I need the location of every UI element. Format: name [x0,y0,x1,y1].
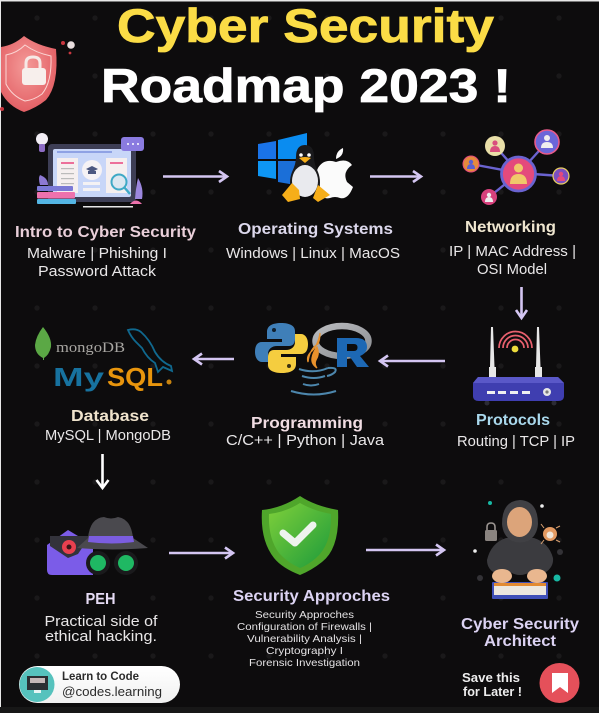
save this for later text [462,671,522,699]
heading: Security Approches: Security Approches [233,588,390,605]
description: Programming: C/C++ | Python | Java [226,433,385,449]
description: Intro: Password Attack [38,264,157,280]
description: Security Approches: Cryptography I [266,645,343,657]
description: Security Approches: Configuration of Firewalls | [237,621,372,633]
badge: Learn to Code [19,666,180,703]
heading: Intro to Cyber Security: Intro to Cyber Security [15,224,196,241]
description: Security Approches [237,609,372,669]
heading: Cyber Security Architect [461,616,579,650]
icon: MongoDB and MySQL logos [35,327,172,392]
icon: Windows, Linux, Apple logos [258,133,353,202]
icon: MongoDB and MySQL logos: mongoDB [56,340,125,356]
save this for later text: for Later ! [463,685,522,699]
title [101,0,511,112]
arrow 5 [194,354,234,364]
icon: wifi router [473,327,564,406]
step: Protocols [457,327,575,450]
description: Networking: IP | MAC Address | [449,244,576,260]
badge name: Learn to Code [62,669,139,683]
icon: MongoDB and MySQL logos: My [53,362,105,392]
icon: red shield with padlock [0,36,75,112]
icon: spy hat with goggles and envelope [47,517,148,575]
step: Cyber Security Architect [461,500,579,650]
description: Protocols: Routing | TCP | IP [457,434,575,450]
icon: MongoDB and MySQL logos: SQL [107,362,163,392]
description: Security Approches: Security Approches [255,609,354,621]
title: Cyber Security [117,0,494,52]
description: PEH: ethical hacking. [45,629,157,645]
step: Intro to Cyber Security [15,133,196,280]
heading: Programming: Programming [251,415,363,432]
save this for later text: Save this [462,671,520,685]
heading: Cyber Security Architect: Cyber Security [461,616,579,633]
description: Networking [449,244,576,278]
heading: Networking: Networking [465,219,556,236]
description: PEH [44,614,159,645]
icon: laptop with course [36,133,144,208]
description: Database: MySQL | MongoDB [45,428,171,444]
arrow 3 [516,287,527,318]
step: Operating Systems [226,133,400,262]
heading: Operating Systems: Operating Systems [238,221,393,238]
arrow 7 [169,548,233,558]
step: Security Approches [233,496,390,669]
arrow 8 [366,544,444,556]
description: PEH: Practical side of [44,614,159,630]
heading: Cyber Security Architect: Architect [484,633,557,650]
description: Security Approches: Vulnerability Analysis | [247,633,362,645]
heading: PEH: PEH [86,591,116,608]
badge handle: @codes.learning [62,684,162,699]
arrow 2 [370,171,421,182]
description: Intro: Malware | Phishing I [27,246,167,262]
arrow 4 [380,356,445,366]
step: Programming [226,323,385,449]
icon: network of people [463,130,569,205]
icon: bookmark button [540,663,580,703]
step: PEH [44,517,159,645]
heading: Database: Database [71,408,149,425]
description: Networking: OSI Model [477,262,547,278]
arrow 6 [96,454,108,488]
title: Roadmap 2023 ! [101,59,511,112]
description: Operating Systems: Windows | Linux | MacOS [226,246,400,262]
description: Security Approches: Forensic Investigation [249,657,360,669]
description: Intro [27,246,167,280]
icon: teal circle with monitor [20,667,54,702]
icon: hooded hacker at keyboard [473,500,563,599]
icon: green check shield [262,496,338,575]
arrow 1 [163,171,227,182]
step: Database [35,327,172,444]
heading: Protocols: Protocols [476,412,550,429]
step: Networking [449,130,576,278]
icon: Python, R, Java logos [255,323,369,394]
